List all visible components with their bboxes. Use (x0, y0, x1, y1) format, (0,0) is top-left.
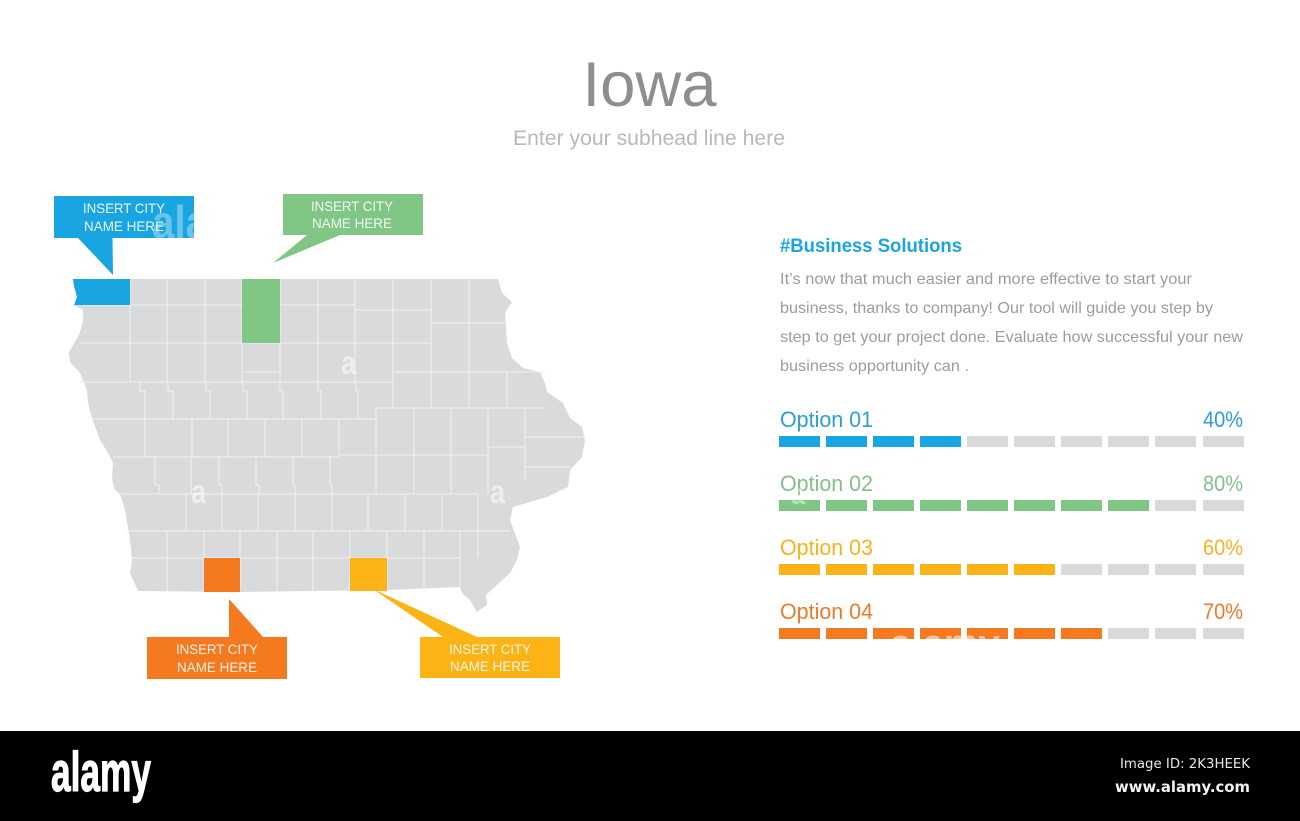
highlighted county: orange (204, 558, 240, 592)
callout: green: INSERT CITY (311, 198, 394, 214)
progress: option 03 (779, 535, 1244, 575)
stock watermark on blue callout: ala (152, 196, 208, 248)
progress: option 04 (779, 603, 1244, 639)
footer logo: alamy (51, 740, 151, 803)
stock watermark glyph on map, east: a (490, 473, 506, 510)
callout: green (273, 194, 423, 263)
callout: yellow (373, 589, 560, 678)
callout: blue (54, 196, 208, 275)
callout: blue: NAME HERE (84, 218, 164, 234)
callout: yellow: INSERT CITY (449, 641, 532, 657)
map: Iowa counties (69, 279, 585, 612)
callout: orange: INSERT CITY (176, 641, 259, 657)
subtitle: Enter your subhead line here (513, 127, 785, 150)
stock watermark on option 04 bar: alamy (890, 622, 1001, 666)
title: Iowa (582, 50, 717, 120)
progress: option 02: 80% (1203, 471, 1243, 496)
progress: option 01: Option 01 (780, 407, 873, 432)
progress: option 01: 40% (1203, 407, 1243, 432)
progress: option 04: 70% (1203, 599, 1243, 624)
text block: description: business, thanks to company! Our tool will guide you step by (780, 300, 1213, 317)
progress: option 02: Option 02 (780, 471, 873, 496)
progress: option 01 (779, 407, 1244, 447)
footer bar: stock image credit (0, 731, 1300, 821)
heading: business solutions: #Business Solutions (780, 236, 962, 257)
callout: yellow: NAME HERE (450, 658, 530, 674)
highlighted county: blue (73, 279, 130, 305)
text block: description: step to get your project done. Evaluate how successful your new (780, 329, 1243, 346)
stock watermark glyph on map, north: a (341, 344, 357, 381)
text block: description: business opportunity can . (780, 358, 969, 375)
text block: description (780, 271, 1243, 375)
stock watermark glyph on map, west: a (191, 473, 207, 510)
callout: orange: NAME HERE (177, 659, 257, 675)
callout: orange (147, 599, 287, 679)
progress: option 04: Option 04 (780, 599, 873, 624)
text block: description: It’s now that much easier and more effective to start your (780, 271, 1193, 288)
footer url: www.alamy.com (1115, 778, 1250, 796)
progress: option 03: Option 03 (780, 535, 873, 560)
highlighted county: green (242, 279, 280, 343)
callout: blue: INSERT CITY (83, 200, 166, 216)
highlighted county: yellow (350, 558, 387, 591)
stock watermark glyph on option 02: a (791, 478, 805, 511)
progress: option 03: 60% (1203, 535, 1243, 560)
footer image id: Image ID: 2K3HEEK (1120, 757, 1250, 772)
progress: option 02 (779, 471, 1244, 511)
callout: green: NAME HERE (312, 215, 392, 231)
